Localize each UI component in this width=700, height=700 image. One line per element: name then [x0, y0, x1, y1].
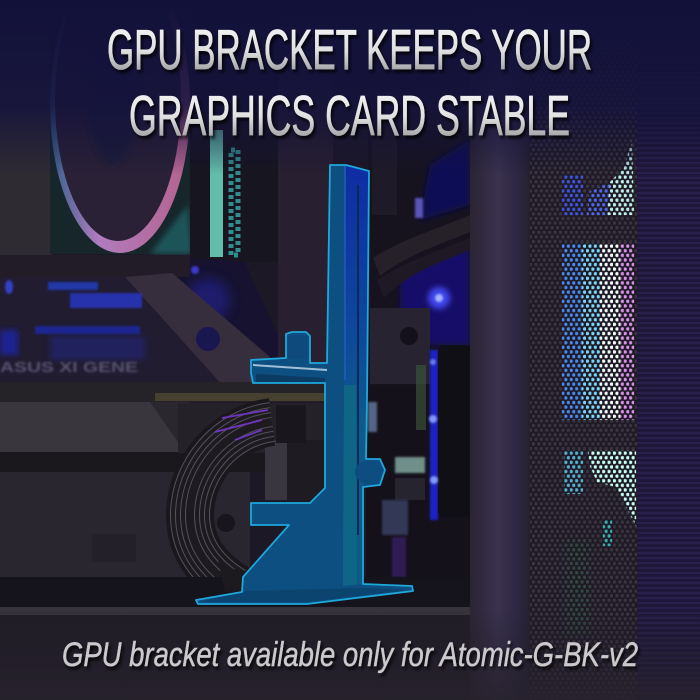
bracket body: [196, 165, 413, 604]
fan housing: [0, 0, 192, 258]
arm underside: [256, 374, 325, 382]
side thumb screw: [355, 460, 383, 484]
diagonal GPU shroud beam: [125, 273, 275, 385]
bottom fade: [0, 610, 700, 700]
bracket front face: [343, 165, 369, 586]
motherboard panel: [0, 277, 222, 385]
graphics card: [0, 382, 330, 577]
case pillar: [470, 0, 532, 700]
bracket column edge: [344, 166, 346, 380]
RAM and board behind bracket: [278, 0, 333, 385]
RGB memory strips: [172, 0, 280, 395]
PCIe power cables: [190, 405, 306, 590]
floor shelf: [0, 577, 470, 700]
bracket lower teal band: [343, 385, 357, 586]
upper right board and tubes: [368, 130, 470, 390]
bracket foot shade: [200, 588, 408, 602]
top thumb screw: [288, 335, 308, 359]
right side panel: [637, 0, 700, 700]
title: [107, 18, 592, 148]
top navy fade: [0, 0, 700, 175]
GPU bracket highlighted: [196, 165, 413, 604]
bracket arm highlight: [253, 364, 327, 371]
bracket outline: [196, 165, 413, 604]
bracket slot: [357, 185, 359, 535]
motherboard panel: ASUS XI GENE: [0, 359, 138, 376]
mesh front panel with RGB glow: [530, 0, 638, 700]
fan bottom ledge: [0, 255, 190, 277]
lower right board with blue strip: [366, 345, 471, 580]
cable loop at base: [218, 550, 290, 592]
